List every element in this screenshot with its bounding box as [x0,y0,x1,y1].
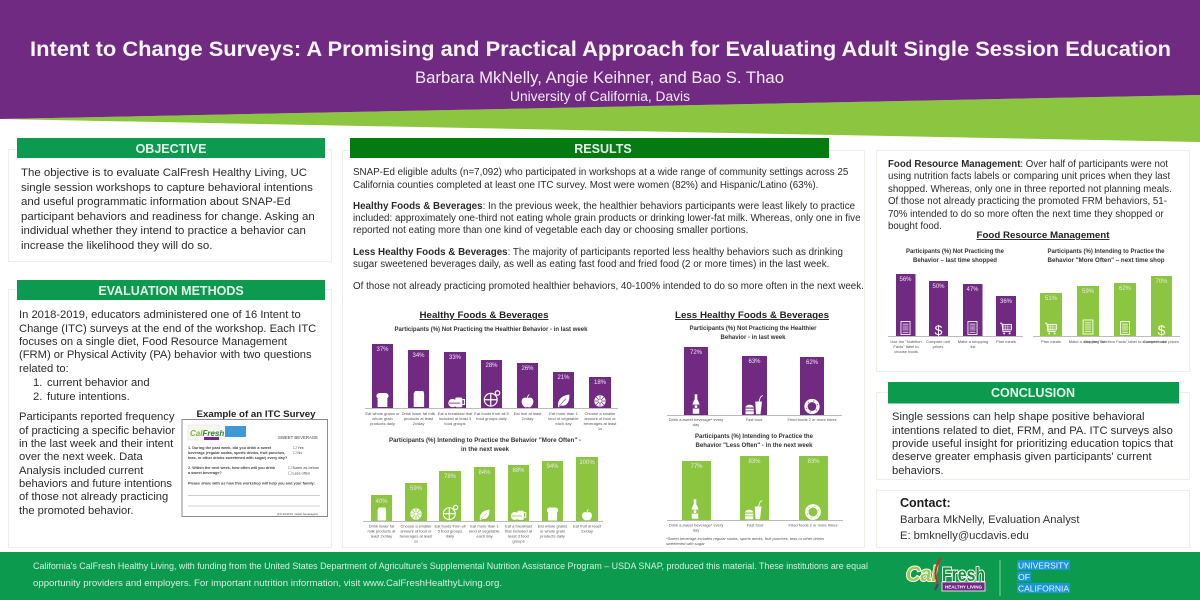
logo: University of California: OF [1018,572,1030,582]
bar: 5 food groups 78%: 5 food groups [438,528,462,534]
bar: 5 food groups 28%: food groups daily [476,416,507,421]
bar: breakfast 33%: 33% [449,355,462,361]
bar: fried foods 62%: 62% [806,360,819,366]
objective text: single session workshops to capture behavioral intentions [21,182,313,194]
logo: CalFresh: Cal [906,563,938,586]
bar: nutrition facts 56%: Facts" label to [893,344,919,349]
survey example: ☐ Less often [288,472,310,476]
bar: smaller portions 18%: amount of food or [584,416,616,421]
chart: healthy intending: in the next week [461,446,509,453]
bar: nutrition facts 62%: Use the "Nutrition Facts" label to choose foods [1084,339,1166,344]
bar: whole grains 37%: whole grain [372,416,393,421]
methods text: current behavior and [47,377,150,389]
bar: plan meals 51%: Plan meals [1041,339,1061,344]
footer [0,552,1200,600]
footer text [33,561,868,589]
icon: dollar: $ [935,322,943,338]
bar: fruit 26%: 2x/day [522,416,533,421]
survey example: teas, or other drinks sweetened with sugar) every day? [188,456,288,460]
methods text: over the next week. Data [19,451,144,463]
logo: University of California: CALIFORNIA [1018,584,1069,594]
bar: breakfast 33%: food groups [444,421,466,426]
bar: lower fat milk 34%: 2x/day [413,421,424,426]
bar: nutrition facts 62% [1084,283,1166,344]
methods text: the promoted behavior. [19,505,133,517]
bar: sweet beverage 77%: day [693,528,699,532]
results text: Healthy Foods & Beverages: In the previous week, the healthier behaviors participants were least likely to practice [353,201,856,212]
survey example: 2. Within the next week, how often will you drink [188,466,276,470]
panel: food resource management [876,150,1190,372]
FRM text: Food Resource Management: Over half of participants were not [888,159,1168,170]
bar: whole grains 37% [365,344,400,426]
logo: CalFresh: HEALTHY LIVING [945,584,983,590]
survey example [182,409,328,516]
bar: lower fat milk 40%: least 2x/day [371,534,392,538]
bar: whole grains 94% [538,461,567,538]
logo: University of California [1017,560,1070,594]
bar: sweet beverage 72%: day [693,422,699,427]
header banner [0,0,1200,142]
bar: breakfast 33%: Eat a breakfast that [438,411,473,416]
bar: vegetables 84% [469,467,500,538]
panel: contact: Contact: [900,496,951,510]
survey example: ☐ No [293,451,302,455]
bar: smaller portions 59%: 1x [414,538,418,544]
logo: CalFresh: Fresh [942,565,985,586]
bar: breakfast 88%: least 3 food [508,534,529,538]
bar: nutrition facts 56% [890,274,922,354]
panel: conclusion [876,382,1190,480]
bar: breakfast 88% [505,465,533,544]
chart: healthy not practicing: Participants (%) Not Practicing the Healthier Behavior - in last week [394,326,588,333]
results text: included: approximately one-third not eating whole grain products or drinking lower-fat milk. Whereas, only one in five [353,213,861,224]
survey example: CalFresh [190,429,224,438]
bar: fruit 26%: Eat fruit at least [514,411,542,416]
survey example: (FS 3/22/13: sweet beverages) [277,512,318,516]
logo: University of California: UNIVERSITY [1018,560,1069,570]
bar: fruit 26%: 26% [521,366,534,372]
survey example: 1. During the past week, did you drink a sweet [188,446,272,450]
bar: lower fat milk 40%: 40% [375,499,388,505]
panel: evaluation methods [8,280,332,548]
bar: whole grains 94%: 94% [546,464,559,470]
bar: whole grains 37%: Eat whole grains or [365,411,400,416]
bar: 5 food groups 78%: Eat foods from all [434,524,466,528]
bar: fruit 100%: Eat fruit at least [573,524,602,528]
methods text: Participants reported frequency [19,411,175,423]
conclusion text: provide useful insight for prioritizing education topics that [892,438,1174,450]
bar: breakfast 88%: Eat a breakfast [505,524,533,528]
bar: compare prices 50% [926,281,951,349]
conclusion text: deserve greater emphasis given participants' current [892,451,1152,463]
objective text: participant behaviors and readiness for change. Asking an [21,211,315,223]
bar: fruit 100%: 100% [579,460,595,466]
bar: smaller portions 59%: Choose a smaller [400,524,432,528]
bar: compare prices 50%: 50% [932,284,945,290]
bar: sweet beverage 72%: Drink a sweet beverage* every [669,417,723,422]
bar: shopping list 47%: Make a shopping [958,339,988,344]
bar: plan meals 36%: Plan meals [996,339,1016,344]
bar: whole grains 37%: products daily [370,421,395,426]
chart: less healthy intending: Participants (%) Intending to Practice the [695,433,813,440]
bar: sweet beverage 72% [669,347,723,427]
chart: less healthy not practicing [667,325,842,427]
bar: smaller portions 59%: 59% [410,486,423,492]
bar: lower fat milk 34%: Drink lower fat milk [402,411,435,416]
bar: smaller portions 59% [400,483,433,544]
chart: healthy not practicing [365,326,618,431]
results text: SNAP-Ed eligible adults (n=7,092) who participated in workshops at a wide range of community settings across 25 [353,167,849,178]
bar: fast food 83% [740,456,769,528]
panel: contact: E: bmknelly@ucdavis.edu [900,530,1029,542]
footnote: sweetened with sugar [666,541,705,546]
methods text: Analysis included current [19,465,144,477]
FRM text: Of those not already practicing the promoted FRM behaviors, 51- [888,196,1167,207]
bar: plan meals 51%: 51% [1045,296,1058,302]
bar: fried foods 83%: 83% [807,459,820,465]
methods text: related to: [19,363,69,375]
results heading: RESULTS [574,142,632,156]
bar: 5 food groups 28%: 28% [485,363,498,369]
footer text: opportunity providers and employers. For important nutrition information, visit www.CalFreshHealthyLiving.org. [33,578,502,589]
bar: 5 food groups 28%: Eat foods from all 5 [474,411,510,416]
methods text: behaviors and future intentions [19,478,172,490]
bar: 5 food groups 78%: daily [446,534,454,538]
affiliation: University of California, Davis [510,89,690,104]
bar: 5 food groups 78%: 78% [444,474,457,480]
bar: vegetables 84%: each day [476,534,493,538]
bar: breakfast 88%: 88% [512,468,525,474]
footnote [666,536,824,546]
methods text: in the last week and their intent [19,438,174,450]
methods text: of those not already practicing [19,491,168,503]
bar: lower fat milk 40%: milk products at [367,528,396,534]
chart: FRM not practicing: Behavior – last time shopped [913,257,997,264]
survey example: a sweet beverage? [188,471,222,475]
bar: whole grains 94%: products daily [540,534,565,538]
conclusion text: behaviors. [892,465,944,477]
bar: shopping list 59%: Make a shopping list [1069,339,1106,344]
bar: smaller portions 18%: 1x [598,426,602,431]
FRM text [888,159,1172,232]
bar: fried foods 62%: Fried foods 2 or more times [788,417,836,422]
conclusion text: Single sessions can help shape positive behavioral [892,411,1144,423]
chart: less healthy intending [667,433,843,532]
title: Intent to Change Surveys: A Promising and Practical Approach for Evaluating Adult Single Session Education [30,38,1171,61]
footer text: California's CalFresh Healthy Living, with funding from the United States Department of Agriculture's Supplemental Nutrition Assistance Program – USDA SNAP, produced this material. These institutions are equal [33,561,868,572]
methods text: focuses on a single diet, Food Resource Management [19,336,288,348]
FRM text: shopped. Whereas, only one in three reported not planning meals. [888,184,1172,195]
bar: smaller portions 18%: 18% [594,380,607,386]
objective text [21,167,315,252]
icon: dollar: $ [1158,322,1166,338]
bar: shopping list 59%: 59% [1082,289,1095,295]
heading: FRM: Food Resource Management [976,230,1110,240]
methods text: 2. [33,391,42,403]
FRM text: bought food. [888,221,942,232]
bar: breakfast 88%: that included at [505,528,533,534]
bar: vegetables 21%: Eat more than 1 [549,411,579,416]
bar: fast food 63%: Fast food [746,417,762,422]
authors: Barbara MkNelly, Angie Keihner, and Bao S. Thao [415,69,784,87]
bar: nutrition facts 56%: Use the "Nutrition [890,339,922,344]
chart: healthy intending: Participants (%) Intending to Practice the Behavior "More Often" - [389,437,581,444]
objective heading: OBJECTIVE [136,142,206,156]
conclusion heading: CONCLUSION [991,386,1075,400]
bar: smaller portions 18%: Choose a smaller [584,411,616,416]
chart: FRM intending: Behavior "More Often" – next time shop [1048,257,1164,264]
results text: California counties completed at least one ITC survey. Most were women (82%) and Hispanic/Latino (63%). [353,180,818,191]
panel: contact [876,490,1190,548]
bar: smaller portions 59%: beverages at least [400,534,433,538]
bar: fast food 63%: 63% [748,359,761,365]
results text [353,167,864,292]
bar: 5 food groups 78% [434,471,466,538]
bar: fried foods 83% [789,456,837,528]
bar: sweet beverage 72%: 72% [690,350,703,356]
objective text: increase the likelihood they will do so. [21,240,212,252]
bar: whole grains 94%: Eat whole grains [538,524,567,528]
bar: plan meals 36% [996,296,1016,344]
bar: lower fat milk 34%: 34% [412,353,425,359]
bar: fast food 83%: 83% [748,459,761,465]
panel: contact: Barbara MkNelly, Evaluation Analyst [900,514,1080,526]
panel: objective [8,138,332,262]
survey example: SWEET BEVERAGE [278,435,318,440]
bar: vegetables 84%: Eat more than 1 [470,524,500,528]
survey example: ☐ Same as before [288,466,319,470]
objective text: The objective is to evaluate CalFresh Healthy Living, UC [21,167,307,179]
bar: smaller portions 18% [584,377,617,431]
heading: healthy foods: Healthy Foods & Beverages [420,310,548,320]
bar: compare prices 70%: 70% [1155,279,1168,285]
conclusion text [892,411,1174,477]
bar: compare prices 70%: Compare unit prices [1143,339,1179,344]
bar: vegetables 21%: each day [555,421,572,426]
methods text [19,309,316,517]
survey example: beverage (regular sodas, sports drinks, fruit punches, [188,451,285,455]
heading: less healthy foods: Less Healthy Foods & Beverages [675,310,829,320]
bar: vegetables 21%: 21% [557,375,570,381]
bar: smaller portions 59%: amount of food or [400,528,432,534]
bar: breakfast 88%: groups [512,538,525,544]
methods text: 1. [33,377,42,389]
chart: FRM not practicing: Participants (%) Not Practicing the [906,248,1004,255]
bar: shopping list 47%: 47% [966,287,979,293]
chart: FRM intending [1033,248,1180,344]
survey example: ☐ Yes [293,446,304,450]
methods text: of practicing a specific behavior [19,425,175,437]
methods text: (FRM) or Physical Activity (PA) behavior with two questions [19,349,312,361]
bar: breakfast 33% [438,352,473,426]
chart: FRM intending: Participants (%) Intending to Practice the [1048,248,1165,255]
bar: plan meals 36%: 36% [1000,299,1013,305]
bar: fruit 100% [573,457,602,534]
bar: vegetables 21% [548,372,579,426]
bar: 5 food groups 28% [474,360,510,421]
results text: sugar sweetened beverages daily, as well as eating fast food and fried food (2 or more times) in the last week. [353,259,829,270]
bar: lower fat milk 40% [367,495,396,538]
bar: sweet beverage 77% [669,461,723,532]
bar: fruit 100%: 2x/day [581,528,593,534]
objective text: and useful programmatic information about SNAP-Ed [21,196,291,208]
bar: lower fat milk 34%: products at least [404,416,434,421]
conclusion text: intentions related to diet, FRM, and PA. ITC surveys also [892,425,1173,437]
bar: shopping list 59% [1069,286,1106,344]
panel: results [342,138,864,548]
chart: less healthy not practicing: Behavior - in last week [720,334,786,341]
methods text: future intentions. [47,391,130,403]
bar: plan meals 51% [1040,293,1062,344]
results text: Of those not already practicing promoted healthier behaviors, 40-100% intended to do so more often in the next week. [353,281,864,292]
bar: lower fat milk 40%: Drink lower fat [369,524,395,528]
bar: fast food 63% [742,356,767,422]
bar: vegetables 21%: kind of vegetable [548,416,579,421]
chart: less healthy not practicing: Participants (%) Not Practicing the Healthier [690,325,817,332]
bar: nutrition facts 56%: 56% [899,277,912,283]
objective text: individual whether they intend to practice a behavior can [21,225,306,237]
FRM text: 70% intended to do so more often the next time they shopped or [888,209,1165,220]
bar: compare prices 70% [1143,276,1179,344]
bar: whole grains 37%: 37% [376,347,389,353]
bar: lower fat milk 34% [402,350,435,426]
bar: nutrition facts 56%: choose foods [894,349,918,354]
bar: fruit 26% [514,363,542,421]
chart: less healthy intending: Behavior "Less Often" - in the next week [696,442,813,449]
survey example: Please share with us how this workshop will help you and your family: [188,482,315,486]
bar: sweet beverage 77%: Drink a sweet beverage* every [669,522,723,528]
survey example: Example of an ITC Survey [196,409,316,419]
bar: nutrition facts 62%: 62% [1119,286,1132,292]
results text: Less Healthy Foods & Beverages: The majority of participants reported less healthy behaviors such as drinking [353,247,843,258]
evaluation methods heading: EVALUATION METHODS [98,284,244,298]
results text: reported not eating more than one kind of vegetable each day or choosing smaller portions. [353,225,748,236]
bar: fried foods 83%: Fried foods 2 or more times [789,522,837,528]
bar: compare prices 50%: prices [933,344,943,349]
bar: whole grains 94%: or whole grain [540,528,565,534]
bar: fast food 83%: Fast food [747,522,763,528]
logo: CalFresh [906,558,985,591]
bar: shopping list 47%: list [971,344,976,349]
chart: FRM not practicing [888,248,1023,354]
chart: healthy intending [363,437,603,544]
bar: fried foods 62% [788,357,836,422]
bar: vegetables 84%: kind of vegetable [469,528,500,534]
methods text: Change (ITC) surveys at the end of the workshop. Each ITC [19,323,316,335]
FRM text: using nutrition facts labels or comparing unit prices when they last [888,171,1170,182]
bar: compare prices 50%: Compare unit [926,339,951,344]
footnote: *Sweet beverage includes regular sodas, sports drinks, fruit punches, teas or other drinks [666,536,824,541]
methods text: In 2018-2019, educators administered one of 16 Intent to [19,309,301,321]
bar: smaller portions 18%: beverages at least [584,421,617,426]
bar: shopping list 47% [958,284,988,349]
bar: sweet beverage 77%: 77% [690,464,703,470]
bar: breakfast 33%: included at least 3 [439,416,472,421]
bar: vegetables 84%: 84% [478,470,491,476]
